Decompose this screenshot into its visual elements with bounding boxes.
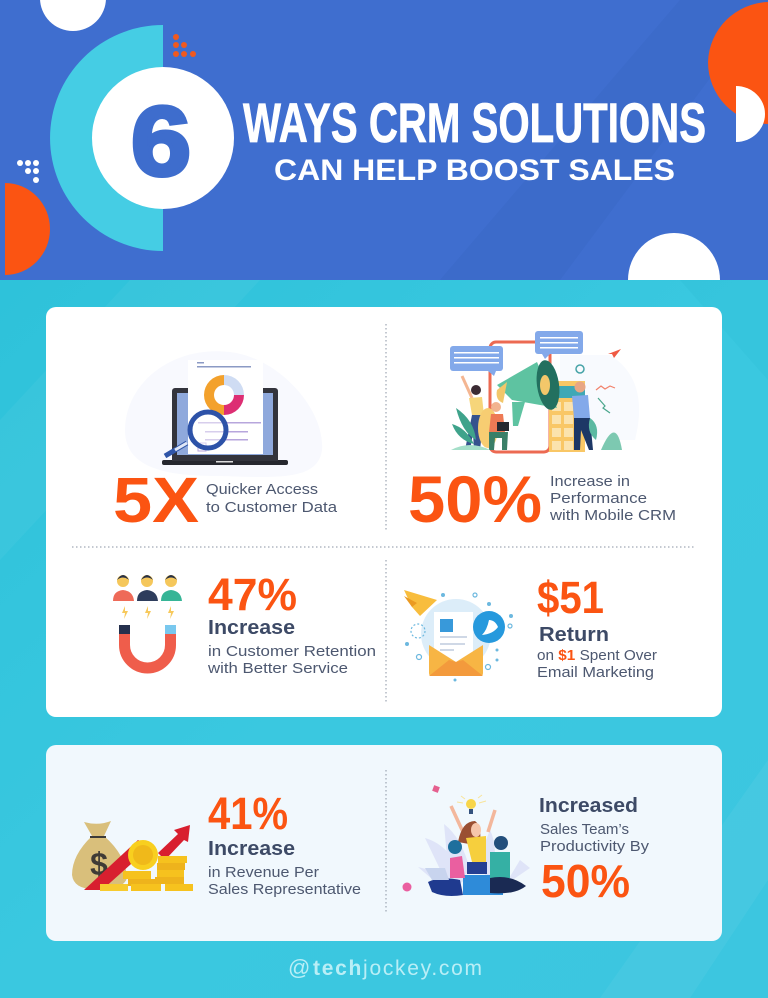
shape: top white circle (40, 0, 106, 31)
person seated (478, 402, 509, 450)
title: CAN HELP BOOST SALES (274, 154, 675, 187)
shape: white dots (17, 160, 39, 183)
plants (451, 408, 622, 450)
icon: magnet attracting customers (113, 575, 182, 668)
panel: bottom stats (46, 745, 722, 941)
stat: 41%: Increase (208, 838, 295, 860)
panel: top stats (46, 307, 722, 717)
stat: 50%: Increase in (550, 474, 630, 490)
stat: 50%: 50% (408, 462, 542, 536)
stat: 50% (408, 462, 676, 536)
shape: bottom white circle (628, 233, 720, 280)
stat: 47%: Increase (208, 617, 295, 639)
stat: $51: on $1 Spent Over (537, 648, 657, 664)
stat: 41% (208, 788, 361, 898)
stat: increased productivity: Sales Team’s (540, 822, 629, 838)
shape: right white half circle (736, 86, 765, 142)
page background (0, 280, 768, 998)
stat: increased productivity: 50% (541, 855, 630, 907)
stat: 47%: with Better Service (207, 661, 348, 677)
icon: money bag, coins and arrow: $ (90, 846, 108, 882)
stat: increased productivity: Increased (539, 794, 638, 817)
stat: $51: Email Marketing (537, 665, 654, 681)
stat: increased productivity: Productivity By (540, 839, 650, 855)
stat: 5X: 5X (113, 464, 199, 536)
person left (462, 376, 484, 450)
stat: 5X (113, 464, 338, 536)
shape: orange dots (173, 34, 196, 57)
stat: $51: Return (539, 624, 609, 646)
icon: megaphone and team (450, 331, 639, 452)
header banner (0, 0, 768, 280)
stat: 41%: in Revenue Per (208, 865, 319, 881)
stat: $51 (537, 572, 657, 681)
icon: money bag, coins and arrow (72, 821, 193, 891)
chat bubble left (450, 346, 503, 376)
icon: laptop with report (125, 351, 322, 477)
icon: email with paper plane (404, 590, 513, 682)
shape: right orange circle (708, 2, 768, 124)
stat: 5X: to Customer Data (206, 500, 338, 516)
stat: 47%: 47% (208, 569, 297, 620)
footer brand: @ (288, 955, 310, 980)
number badge (92, 67, 234, 209)
stat: 5X: Quicker Access (206, 482, 318, 498)
stat: increased productivity (539, 794, 650, 907)
chat bubble right (535, 331, 583, 359)
stat: 50%: with Mobile CRM (549, 508, 676, 524)
stat: 41%: Sales Representative (208, 882, 361, 898)
stat: 50%: Performance (550, 491, 647, 507)
number badge: 6 (131, 86, 191, 196)
stat: 41%: 41% (208, 788, 288, 839)
shape: left orange half circle (5, 183, 50, 275)
person right (572, 382, 593, 450)
footer brand: techjockey.com (313, 957, 482, 980)
icon: team with idea bulb (402, 785, 530, 896)
stat: 47% (207, 569, 376, 677)
stat: 47%: in Customer Retention (208, 644, 376, 660)
stat: $51: $51 (537, 572, 604, 623)
shape: teal half circle (50, 25, 163, 251)
title (243, 91, 706, 187)
